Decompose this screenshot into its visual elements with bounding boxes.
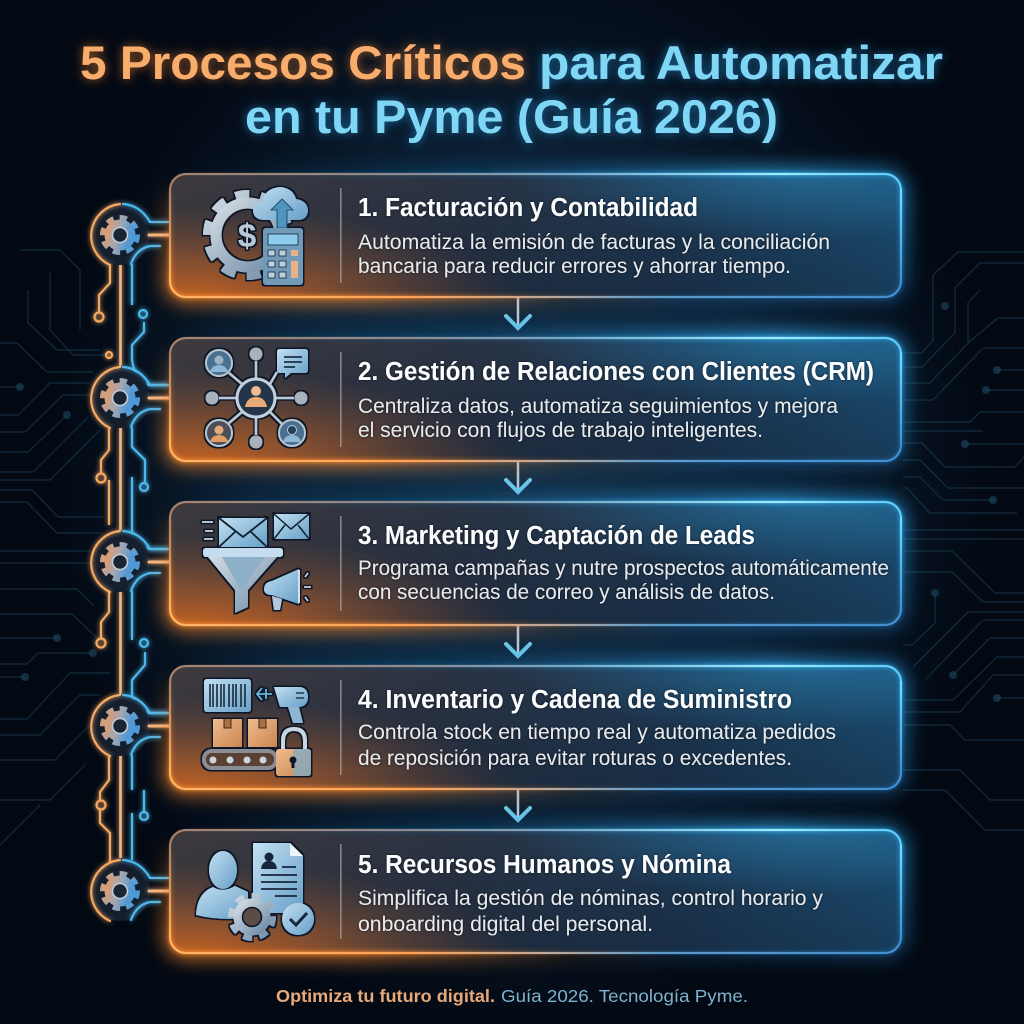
- heading 2: 2. Gestión de Relaciones con Clientes (CRM): [358, 358, 874, 386]
- description 5: Simplifica la gestión de nóminas, control horario y: [358, 887, 823, 910]
- icon: gear, cloud and calculator: $: [238, 217, 256, 254]
- background circuit dots: [16, 302, 1001, 702]
- gear node 4: [90, 695, 170, 756]
- arrow 3 to 4: [506, 625, 530, 656]
- arrow 4 to 5: [506, 789, 530, 820]
- description 1: [358, 231, 830, 278]
- icon: barcode, boxes and padlock: [202, 679, 311, 776]
- icon: gear, cloud and calculator: [207, 187, 308, 285]
- heading 4: 4. Inventario y Cadena de Suministro: [358, 686, 792, 714]
- gear node 3: [90, 531, 170, 592]
- heading 5: 5. Recursos Humanos y Nómina: [358, 851, 732, 879]
- icon: customer network: [206, 348, 308, 448]
- footer: [276, 986, 748, 1006]
- gear node 5: [90, 860, 170, 921]
- gear node 1: [90, 204, 170, 265]
- icon: person, document, gear and check: [196, 843, 314, 938]
- timeline circuit: [94, 263, 168, 862]
- heading 1: 1. Facturación y Contabilidad: [358, 194, 698, 222]
- panel: recursos humanos: [170, 830, 901, 953]
- icon: funnel, envelopes and megaphone: [202, 514, 311, 613]
- description 4: [358, 721, 836, 770]
- panel: CRM: [170, 338, 901, 461]
- title second line: en tu Pyme (Guía 2026): [245, 90, 778, 143]
- description 3: Programa campañas y nutre prospectos automáticamente: [358, 557, 889, 580]
- arrow 2 to 3: [506, 461, 530, 492]
- description 2: el servicio con flujos de trabajo inteligentes.: [358, 419, 763, 442]
- description 3: con secuencias de correo y análisis de datos.: [358, 581, 775, 604]
- title blue part: para Automatizar: [539, 36, 943, 89]
- panel: inventario: [170, 666, 901, 789]
- description 2: [358, 395, 838, 442]
- description 5: [358, 887, 823, 936]
- heading 3: 3. Marketing y Captación de Leads: [358, 522, 755, 550]
- background circuit pattern: [0, 250, 1024, 845]
- footer note: Guía 2026. Tecnología Pyme.: [501, 986, 748, 1006]
- footer bold tagline: Optimiza tu futuro digital.: [276, 986, 495, 1006]
- description 1: bancaria para reducir errores y ahorrar tiempo.: [358, 255, 791, 278]
- description 1: Automatiza la emisión de facturas y la conciliación: [358, 231, 830, 254]
- panel: facturación: [170, 174, 901, 297]
- description 4: Controla stock en tiempo real y automatiza pedidos: [358, 721, 836, 744]
- description 4: de reposición para evitar roturas o excedentes.: [358, 747, 792, 770]
- gear node 2: [90, 367, 170, 428]
- title: [80, 36, 943, 143]
- title orange part: 5 Procesos Críticos: [80, 36, 526, 89]
- panel: marketing: [170, 502, 901, 625]
- description 5: onboarding digital del personal.: [358, 913, 653, 936]
- arrow 1 to 2: [506, 297, 530, 328]
- description 3: [358, 557, 889, 604]
- description 2: Centraliza datos, automatiza seguimientos y mejora: [358, 395, 838, 418]
